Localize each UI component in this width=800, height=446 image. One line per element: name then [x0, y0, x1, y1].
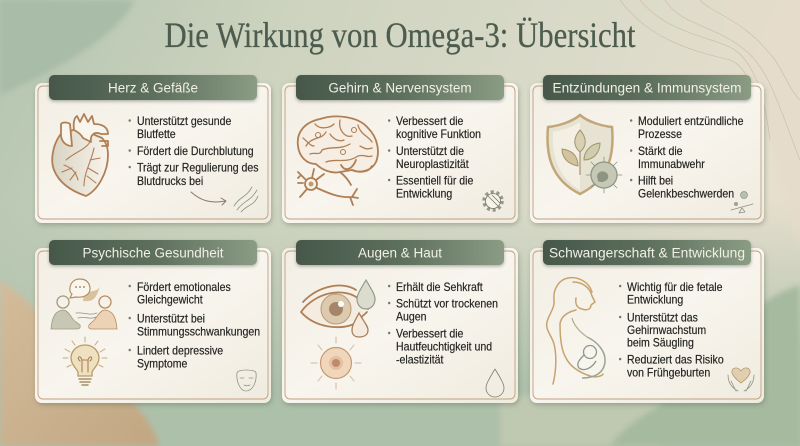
bullet list: Schützt vor trockenen	[396, 298, 498, 311]
icon: balance scale	[731, 192, 753, 213]
bullet list: Neuroplastizität	[396, 159, 469, 171]
bullet list: Unterstützt bei	[137, 313, 205, 326]
bullet list: Stimmungsschwankungen	[137, 326, 260, 339]
panel: Psychische Gesundheit	[35, 240, 271, 403]
icon: brain and neuron	[298, 116, 378, 205]
heading: Herz & Gefäße	[49, 75, 257, 100]
bullet list: Augen	[396, 311, 427, 324]
icon: gear	[484, 192, 502, 210]
bullet list: beim Säugling	[627, 337, 694, 350]
bullet list: Gleichgewicht	[137, 294, 203, 307]
bullet list	[388, 116, 481, 201]
bullet list: Blutfette	[137, 129, 176, 141]
title: Die Wirkung von Omega-3: Übersicht	[164, 15, 636, 55]
bullet list: Hautfeuchtigkeit und	[396, 341, 492, 354]
bullet list: von Frühgeburten	[627, 367, 710, 380]
bullet list: Verbessert die	[396, 116, 463, 128]
bullet list: Prozesse	[638, 129, 682, 141]
bullet list: Reduziert das Risiko	[627, 354, 724, 367]
bullet list: Symptome	[137, 358, 187, 371]
bullet list: Immunabwehr	[638, 159, 705, 171]
bullet list: Gehirnwachstum	[627, 325, 706, 337]
bullet list: -elastizität	[396, 354, 443, 367]
panel: Augen & Haut	[282, 240, 518, 403]
icon: face	[237, 370, 256, 391]
icon: light bulb	[63, 337, 107, 385]
heading: Schwangerschaft & Entwicklung	[543, 240, 751, 265]
bullet list: Stärkt die	[638, 146, 683, 158]
bullet list: Wichtig für die fetale	[627, 282, 723, 294]
bullet list: Erhält die Sehkraft	[396, 282, 483, 294]
heading: Psychische Gesundheit: Psychische Gesundheit	[82, 246, 224, 260]
heading: Gehirn & Nervensystem: Gehirn & Nervensystem	[328, 80, 472, 96]
heading: Gehirn & Nervensystem	[296, 75, 504, 100]
heading: Schwangerschaft & Entwicklung: Schwangerschaft & Entwicklung	[549, 246, 745, 260]
bullet list	[630, 116, 744, 201]
icon: eye with drops	[301, 280, 375, 337]
bullet list: Fördert die Durchblutung	[137, 146, 254, 158]
heading: Herz & Gefäße: Herz & Gefäße	[108, 80, 198, 96]
bullet list: Unterstützt gesunde	[137, 116, 231, 128]
bullet list: kognitive Funktion	[396, 129, 481, 141]
bullet list: Entwicklung	[627, 294, 683, 307]
panel: Herz & Gefäße	[35, 75, 271, 223]
panel: Entzündungen & Immunsystem	[530, 75, 764, 223]
icon: pregnant woman	[547, 278, 605, 384]
bullet list: Fördert emotionales	[137, 282, 231, 294]
icon: skin cell with rays	[311, 337, 361, 389]
heading: Augen & Haut	[296, 240, 504, 265]
icon: arrow to vessel	[191, 187, 258, 212]
heading: Entzündungen & Immunsystem: Entzündungen & Immunsystem	[552, 80, 742, 96]
bullet list: Trägt zur Regulierung des	[137, 162, 259, 175]
bullet list: Hilft bei	[638, 175, 673, 188]
bullet list: Moduliert entzündliche	[638, 116, 744, 128]
heading: Augen & Haut: Augen & Haut	[358, 246, 442, 260]
bullet list	[129, 282, 260, 371]
bullet list	[619, 282, 724, 380]
icon: conversation	[51, 279, 117, 329]
icon: heart	[52, 114, 108, 196]
bullet list: Unterstützt die	[396, 146, 464, 158]
bullet list: Gelenkbeschwerden	[638, 188, 734, 201]
panel: Gehirn & Nervensystem	[282, 75, 518, 223]
heading: Entzündungen & Immunsystem	[543, 75, 751, 100]
bullet list: Blutdrucks bei	[137, 176, 203, 188]
bullet list: Entwicklung	[396, 188, 452, 201]
bullet list: Lindert depressive	[137, 345, 223, 358]
bullet list: Unterstützt das	[627, 312, 698, 325]
heading: Psychische Gesundheit	[49, 240, 257, 265]
icon: drop	[486, 369, 504, 397]
bullet list: Verbessert die	[396, 328, 463, 341]
bullet list: Essentiell für die	[396, 175, 473, 188]
bullet list	[129, 116, 259, 188]
panel: Schwangerschaft & Entwicklung	[530, 240, 764, 403]
icon: hands holding heart	[728, 368, 754, 391]
icon: shield with leaves and virus	[547, 115, 622, 194]
bullet list	[388, 282, 498, 367]
